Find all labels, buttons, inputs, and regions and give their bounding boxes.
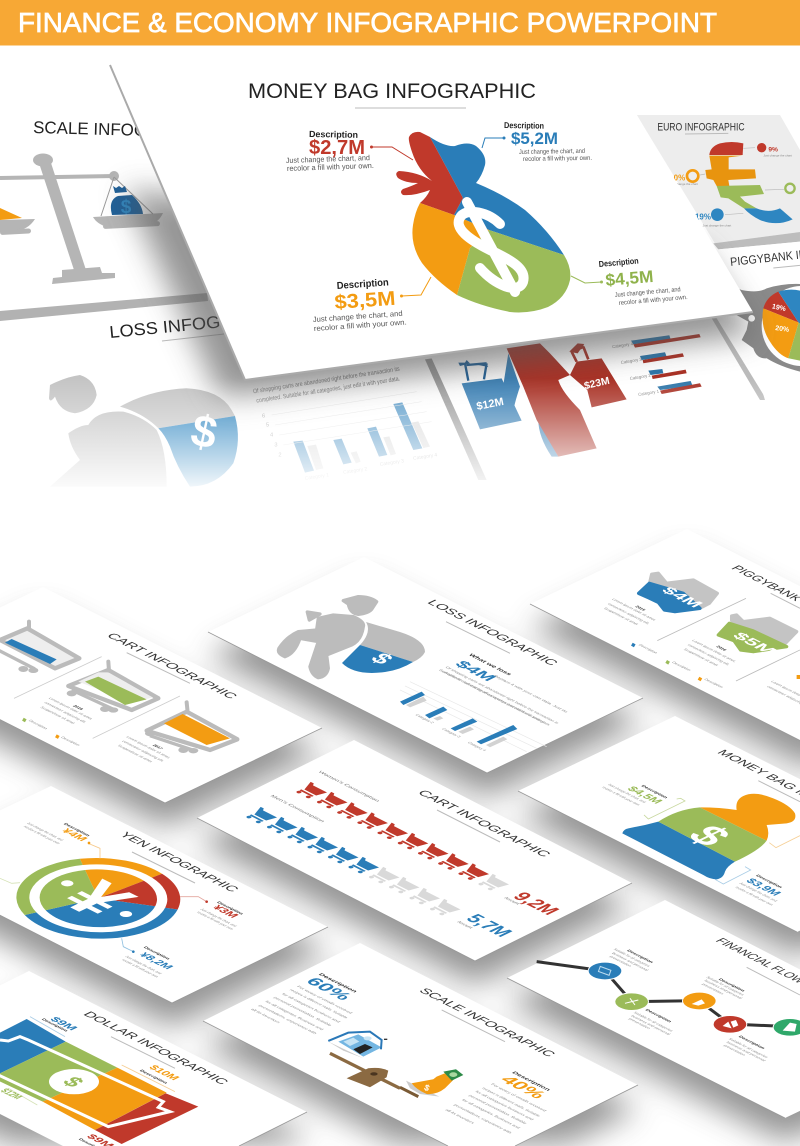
loss title and stats: Of shopping carts are abandoned right before the transaction is [444, 666, 561, 724]
labels: Description [138, 1069, 170, 1085]
white dollar sign [459, 202, 524, 292]
bar chart slide: Category 3 [379, 458, 405, 468]
scale slide title: SCALE INFOGRAPHIC [33, 118, 211, 142]
bar chart slide: 5 [266, 423, 269, 429]
node captions: Description [737, 1035, 767, 1050]
callout red: Description [309, 129, 358, 140]
callout blue: Description [504, 120, 544, 131]
title: CART INFOGRAPHIC [103, 631, 241, 701]
60 percent block and house: For weary of emails received [296, 985, 354, 1014]
captions: 2015 [634, 605, 648, 612]
captions: Description [60, 736, 82, 747]
node captions: Suitable for all categories [705, 976, 746, 996]
loss title and stats: Suitable for all categories and presentations today [437, 668, 547, 723]
bar chart slide: 4 [270, 433, 273, 439]
title and 40 percent block: presentations, experience with [452, 1103, 514, 1134]
fade to white over lower upper section [0, 378, 800, 495]
captions: Lorem ipsum dolor sit amet, [125, 735, 172, 759]
bar chart slide: Category 2 [343, 466, 368, 476]
piggybank slide [718, 240, 800, 400]
callout orange: Just change the chart, and [313, 309, 403, 324]
women's row of carts: Women's Consumption [316, 770, 381, 803]
node captions: Suitable for all categories [612, 948, 652, 967]
yen callouts: recolor a fill with your own [196, 911, 235, 930]
node captions: presentation [722, 1044, 747, 1056]
panel: scale infographic [250, 973, 559, 1134]
pig 2016 [718, 615, 797, 657]
60 percent block and house: presentations, experience with [257, 1004, 319, 1035]
callout blue: recolor a fill with your own. [523, 155, 592, 163]
captions: Description [671, 661, 693, 672]
scale pan strings [101, 177, 153, 216]
title and 40 percent block: recipes is different mails. Suitable [481, 1087, 542, 1117]
yen orange label [22, 822, 92, 845]
loss title and stats [400, 598, 570, 752]
loss title and stats: Replace it with your own data. Just do [492, 674, 570, 713]
orange bag on scale: $ [423, 1082, 431, 1093]
callout orange: $3,5M [334, 288, 396, 314]
pig 2016: $5M [728, 631, 780, 657]
title and 40 percent block: Description [510, 1071, 552, 1092]
captions: 2017 [151, 744, 165, 750]
shopping slide [425, 343, 627, 480]
blue money bag on scale [111, 186, 143, 218]
node captions: presentation [608, 955, 633, 967]
orange header band [0, 0, 800, 46]
panel: yen infographic [0, 822, 245, 978]
node captions: Description [626, 949, 655, 964]
captions [602, 598, 800, 708]
node red [713, 1015, 747, 1034]
loss title underline [162, 334, 224, 341]
men's row of carts: Men's Consumption [268, 794, 326, 824]
orange segment [412, 203, 489, 295]
loss bar chart: Category 3 [441, 727, 462, 738]
horizontal bar chart on shopping slide [612, 318, 767, 400]
horizontal bar chart on shopping slide: Category 1 [638, 389, 660, 397]
captions: Suspendisse sit amet [39, 706, 77, 725]
totals [456, 890, 564, 940]
captions: Description [27, 719, 49, 730]
captions: Suspendisse sit amet [682, 648, 721, 667]
callout green: Just change the chart, and [615, 286, 681, 299]
60 percent block and house: Description [317, 973, 358, 994]
horizontal bar chart on shopping slide: Category 3 [620, 357, 643, 365]
callout green: Description [598, 256, 639, 269]
bar chart slide: Of shopping carts are abandoned right before the transaction its [253, 366, 400, 395]
node captions: business and personal [725, 1041, 767, 1062]
labels: $4,5M [624, 785, 665, 805]
yen donut chart: ¥ [42, 871, 153, 926]
title and 40 percent block: personal presentation. Suitable [467, 1094, 529, 1125]
captions [22, 697, 172, 763]
60 percent block and house: recipes is different mails. Suitable [288, 988, 350, 1019]
labels: Just change the chart, and [738, 882, 779, 902]
labels [0, 1016, 181, 1146]
loss title and stats: What we loss [467, 653, 513, 676]
node captions: Description [717, 978, 747, 992]
labels: Description [40, 1018, 70, 1032]
blue money bag on scale: $ [121, 197, 132, 218]
callout red: $2,7M [309, 137, 365, 159]
men's row of carts [242, 794, 463, 917]
title: YEN INFOGRAPHIC [116, 830, 242, 894]
captions: consectetur adipiscing elit. [606, 602, 652, 625]
header title: FINANCE & ECONOMY INFOGRAPHIC POWERPOINT [18, 7, 717, 38]
loss bar chart: Category 2 [414, 713, 436, 724]
labels: Description [640, 784, 670, 799]
yen callouts: Just change the chart, and [199, 908, 238, 927]
euro slide [637, 115, 800, 249]
euro slide: EURO INFOGRAPHIC [657, 122, 745, 134]
60 percent block and house: personal presentation. Suitable [272, 996, 334, 1027]
callout blue [482, 120, 592, 163]
callout red [286, 129, 413, 173]
bar chart slide: 6 [262, 413, 265, 419]
lower slide shadows [0, 553, 800, 1144]
title and 40 percent block: for all categories. Business and [461, 1098, 522, 1129]
flow line [537, 962, 790, 1027]
yen callouts: Just change the chart, and [124, 955, 163, 975]
node captions: business and personal [703, 979, 744, 1000]
node teal [773, 1018, 800, 1037]
loss title and stats: $4M [450, 659, 499, 683]
yen callouts: ¥8,2M [136, 952, 175, 971]
yen donut chart [0, 846, 205, 951]
euro slide: Just change the chart [669, 182, 698, 186]
captions: Lorem ipsum dolor sit amet, [611, 598, 658, 621]
panel: piggybank infographic [602, 564, 800, 708]
60 percent block and house: 60% [301, 975, 356, 1002]
yen callouts: Description [216, 901, 245, 915]
yen callouts: Description [142, 946, 172, 960]
node captions: presentation [627, 1017, 652, 1030]
captions: Description [637, 643, 659, 654]
title: CART INFOGRAPHIC [414, 788, 554, 859]
orange bag on scale [400, 1069, 463, 1097]
horizontal bar chart on shopping slide: Category 4 [612, 341, 634, 349]
loss man and bag [49, 375, 238, 487]
scale graphic [0, 154, 163, 284]
title and 40 percent block: For weary of emails received [490, 1083, 548, 1112]
upper background slides [0, 115, 800, 487]
piggybank slide: 20% [775, 325, 790, 334]
labels: recolor a fill with your own [601, 786, 642, 806]
horizontal bar chart on shopping slide: Category 2 [629, 373, 652, 381]
node captions: presentation [701, 983, 726, 995]
60 percent block and house: for all categories business and [281, 992, 342, 1023]
gold bars on scale [0, 208, 22, 220]
title and 40 percent block: all its investors [444, 1108, 476, 1124]
loss man figure [278, 597, 377, 678]
bar chart slide: 2 [278, 453, 281, 459]
callout red: Just change the chart, and [286, 153, 370, 165]
bar chart slide [253, 366, 438, 482]
cart blue [0, 622, 79, 673]
captions: consectetur adipiscing elit. [686, 643, 732, 666]
60 percent block and house [250, 973, 400, 1088]
euro slide: Just change the chart [703, 224, 731, 228]
node captions: Suitable for all categories [632, 1011, 675, 1032]
callout green: recolor a fill with your own. [619, 294, 688, 307]
callout orange: Description [336, 277, 389, 292]
euro slide: 19% [695, 212, 711, 221]
loss bar chart [400, 682, 547, 752]
callout orange: recolor a fill with your own. [314, 318, 407, 333]
cart orange [145, 702, 237, 753]
labels: Description [755, 874, 784, 889]
pig 2015 [639, 573, 717, 612]
red segment [396, 132, 463, 215]
panel: cart consumption infographic [242, 770, 564, 940]
euro slide: Just change the chart [763, 154, 792, 158]
captions: Description [703, 678, 725, 689]
panel: money bag infographic, lower [601, 748, 800, 906]
panel: financial flow infographic [537, 936, 800, 1062]
piggybank slide: 19% [771, 303, 787, 313]
yen callouts [0, 842, 245, 978]
labels: $10M [146, 1064, 181, 1082]
pig 2015: $4M [657, 586, 706, 610]
seesaw and house [328, 1032, 400, 1088]
hero title: MONEY BAG INFOGRAPHIC [248, 80, 536, 103]
node captions: business and personal [611, 952, 650, 971]
captions: Lorem ipsum dolor sit amet, [47, 697, 95, 720]
green segment [457, 230, 570, 312]
totals: Amount [503, 896, 522, 906]
node green [614, 992, 649, 1011]
captions: Lorem ipsum dolor sit amet, [691, 639, 738, 663]
loss title and stats: LOSS INFOGRAPHIC [424, 598, 562, 667]
labels: Just change the chart, and [607, 783, 648, 803]
yen orange label: recolor a fill with your own [22, 825, 62, 845]
loss man and bag: $ [187, 404, 222, 459]
node captions: Suitable for all categories [727, 1037, 770, 1059]
bar chart slide: completed. Suitable for all categories, just edit it with your data. [256, 375, 401, 405]
captions: Suspendisse sit amet [602, 607, 641, 626]
loss bag [342, 622, 425, 673]
loss title and stats: completed. Suitable for all categories, just edit it with your data. [441, 670, 553, 726]
euro slide: 0% [674, 173, 685, 182]
shopping slide: $23M [583, 376, 611, 392]
node captions [608, 948, 770, 1062]
60 percent block and house: all its investors [250, 1008, 282, 1024]
yen orange label: Description [62, 822, 92, 837]
dividers [14, 657, 180, 738]
brackets [644, 798, 685, 819]
callout blue: $5,2M [511, 129, 558, 148]
women's row of carts [292, 770, 511, 892]
yen orange label: Just change the chart, and [26, 822, 65, 841]
labels: $9M [47, 1016, 79, 1032]
totals: 9,2M [508, 890, 564, 918]
dividers [657, 598, 800, 681]
node blue [588, 962, 622, 980]
bag: $ [676, 820, 742, 852]
captions: 2016 [715, 645, 729, 652]
node captions: Description [644, 1008, 674, 1023]
captions: consectetur adipiscing elit. [43, 701, 88, 724]
loss slide title: LOSS INFOGRAPHIC [109, 306, 290, 342]
callout green: $4,5M [605, 267, 654, 290]
yen callouts: recolor a fill with your own [121, 958, 160, 978]
bar chart slide: Category 1 [304, 472, 330, 482]
labels [601, 783, 784, 906]
cart green [67, 662, 158, 713]
banknote: $ [57, 1074, 90, 1090]
labels: recolor a fill with your own [734, 886, 775, 906]
totals: 5,7M [461, 912, 517, 940]
hero slide: money bag [110, 65, 753, 380]
panel: cart infographic, three carts [0, 622, 241, 763]
bar chart slide: 3 [274, 443, 277, 449]
captions: 2016 [72, 704, 85, 711]
title and 40 percent block [400, 986, 559, 1134]
60 percent block and house: for all categories. Business and [264, 1000, 325, 1031]
callout blue: Just change the chart, and [519, 148, 585, 156]
totals: Amount [456, 920, 475, 930]
loss bag: $ [365, 650, 400, 667]
node orange [682, 992, 717, 1010]
loss bar chart: Category 4 [466, 741, 489, 752]
callout red: recolor a fill with your own. [287, 161, 374, 173]
captions: consectetur adipiscing elit. [121, 740, 166, 762]
money bag chart [396, 132, 570, 312]
shopping slide: $12M [476, 396, 505, 413]
callout orange [313, 277, 431, 333]
panel: loss infographic [278, 597, 570, 752]
hero shadow [125, 190, 755, 400]
blue segment [430, 137, 564, 255]
euro slide: 9% [768, 147, 778, 154]
yen orange label: ¥4M [58, 828, 89, 843]
bag [622, 794, 795, 879]
labels: $3,9M [743, 877, 783, 897]
bar chart slide: Category 4 [413, 452, 438, 462]
title and 40 percent block: SCALE INFOGRAPHIC [416, 986, 559, 1059]
lower slide sheets [0, 529, 800, 1146]
slide strip between scale and loss [0, 293, 208, 321]
node captions: business and personal [630, 1014, 672, 1036]
panel: dollar infographic [0, 1010, 232, 1146]
callout green [571, 256, 688, 307]
title and 40 percent block: for all categories business and [474, 1090, 535, 1121]
yen callouts: ¥3M [209, 904, 240, 920]
title and 40 percent block: 40% [496, 1074, 551, 1101]
captions: Suspendisse sit amet [116, 744, 155, 763]
hero title underline [355, 107, 466, 109]
title: DOLLAR INFOGRAPHIC [80, 1010, 232, 1086]
banknote [0, 1019, 198, 1144]
